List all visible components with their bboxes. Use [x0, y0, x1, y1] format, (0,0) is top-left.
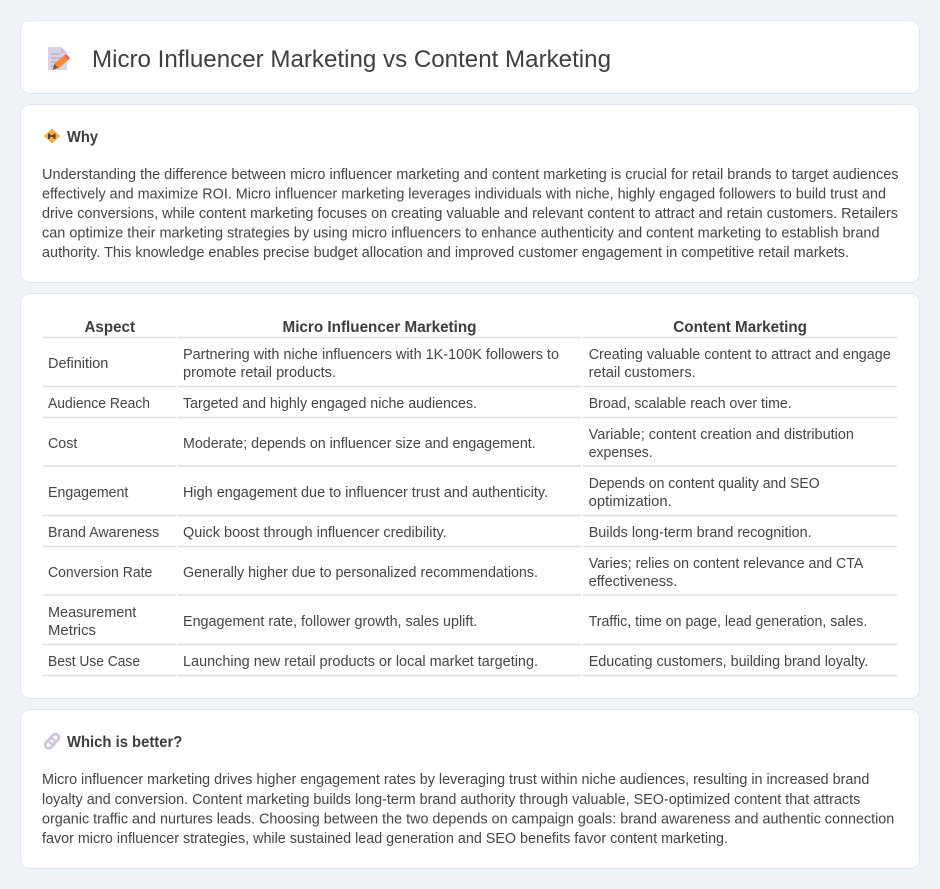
row: brand awareness: Builds long-term brand recognition.: [589, 525, 812, 541]
row: definition: promote retail products.: [183, 365, 336, 381]
text block: which is better paragraph: organic traffic and nurtures leads. Choosing between the two depends on campaign goals: brand awareness and authentic connection: [42, 812, 894, 828]
icon: document with pencil: [48, 47, 70, 70]
row: conversion rate: Varies; relies on content relevance and CTA: [589, 556, 864, 572]
row: brand awareness: Brand Awareness: [48, 525, 159, 541]
row: audience reach: Audience Reach: [48, 396, 150, 412]
panel: title header: [20, 20, 920, 94]
text block: why paragraph: drive conversions, while content marketing focuses on creating valuable and relevant content to attract and retain customers. Retailers: [42, 206, 898, 222]
row: best use case: Best Use Case: [48, 654, 140, 670]
row: engagement: [48, 476, 820, 510]
text block: which is better paragraph: loyalty and conversion. Content marketing builds long-term brand authority through valuable, SEO-optimized content that attracts: [42, 792, 860, 808]
table header row: Micro Influencer Marketing: [282, 319, 476, 336]
heading: which is better: Which is better?: [67, 734, 182, 751]
row: cost: expenses.: [589, 445, 653, 461]
panel: why: [20, 104, 920, 282]
table header row: [84, 319, 807, 336]
text block: why paragraph: can optimize their marketing strategies by using micro influencers to enhance authenticity and content marketing to establish brand: [42, 226, 880, 242]
row: engagement: Depends on content quality and SEO: [589, 476, 820, 492]
row: cost: Moderate; depends on influencer size and engagement.: [183, 436, 536, 452]
row: audience reach: [48, 396, 792, 412]
text block: which is better paragraph: Micro influencer marketing drives higher engagement rates by leveraging trust within niche audiences, resulting in increased brand: [42, 772, 869, 788]
panel: comparison table: [20, 294, 920, 698]
row: definition: Partnering with niche influencers with 1K-100K followers to: [183, 347, 559, 363]
row: cost: Variable; content creation and distribution: [589, 427, 854, 443]
table header row: Content Marketing: [673, 319, 807, 336]
row: best use case: Launching new retail products or local market targeting.: [183, 654, 538, 670]
text block: why paragraph: effectively and maximize ROI. Micro influencer marketing leverages individuals with niche, highly engaged followers to build trust and: [42, 186, 886, 202]
row: definition: [48, 347, 891, 381]
row: engagement: Engagement: [48, 485, 128, 501]
row: measurement metrics: Engagement rate, follower growth, sales uplift.: [183, 614, 477, 630]
icon: chain link: [44, 733, 60, 750]
panel: which is better: [20, 710, 920, 868]
row: audience reach: Targeted and highly engaged niche audiences.: [183, 396, 477, 412]
row: brand awareness: [48, 525, 812, 541]
row: conversion rate: Generally higher due to personalized recommendations.: [183, 565, 538, 581]
row: cost: Cost: [48, 436, 77, 452]
title: Micro Influencer Marketing vs Content Marketing: [92, 46, 611, 73]
text block: why paragraph: [42, 167, 898, 261]
row: audience reach: Broad, scalable reach over time.: [589, 396, 792, 412]
row: measurement metrics: Traffic, time on page, lead generation, sales.: [589, 614, 867, 630]
text block: which is better paragraph: [42, 772, 894, 847]
row: brand awareness: Quick boost through influencer credibility.: [183, 525, 447, 541]
row: measurement metrics: Measurement: [48, 605, 136, 621]
row: definition: Creating valuable content to attract and engage: [589, 347, 891, 363]
row: measurement metrics: [48, 605, 867, 639]
row: definition: Definition: [48, 356, 108, 372]
heading: why: Why: [67, 129, 98, 146]
text block: why paragraph: Understanding the difference between micro influencer marketing and content marketing is crucial for retail brands to target audiences: [42, 167, 898, 183]
row: conversion rate: Conversion Rate: [48, 565, 152, 581]
icon: warning diamond: [44, 128, 60, 144]
table header row: Aspect: [84, 319, 136, 336]
row: cost: [48, 427, 854, 461]
text block: why paragraph: authority. This knowledge enables precise budget allocation and improved customer engagement in competitive retail markets.: [42, 245, 849, 261]
row: conversion rate: [48, 556, 864, 590]
row: measurement metrics: Metrics: [48, 623, 96, 639]
row: best use case: Educating customers, building brand loyalty.: [589, 654, 868, 670]
row: engagement: optimization.: [589, 494, 672, 510]
text block: which is better paragraph: favor micro influencer strategies, while sustained lead generation and SEO benefits favor content marketing.: [42, 831, 728, 847]
row: engagement: High engagement due to influencer trust and authenticity.: [183, 485, 548, 501]
row: best use case: [48, 654, 868, 670]
row: conversion rate: effectiveness.: [589, 574, 677, 590]
row: definition: retail customers.: [589, 365, 696, 381]
